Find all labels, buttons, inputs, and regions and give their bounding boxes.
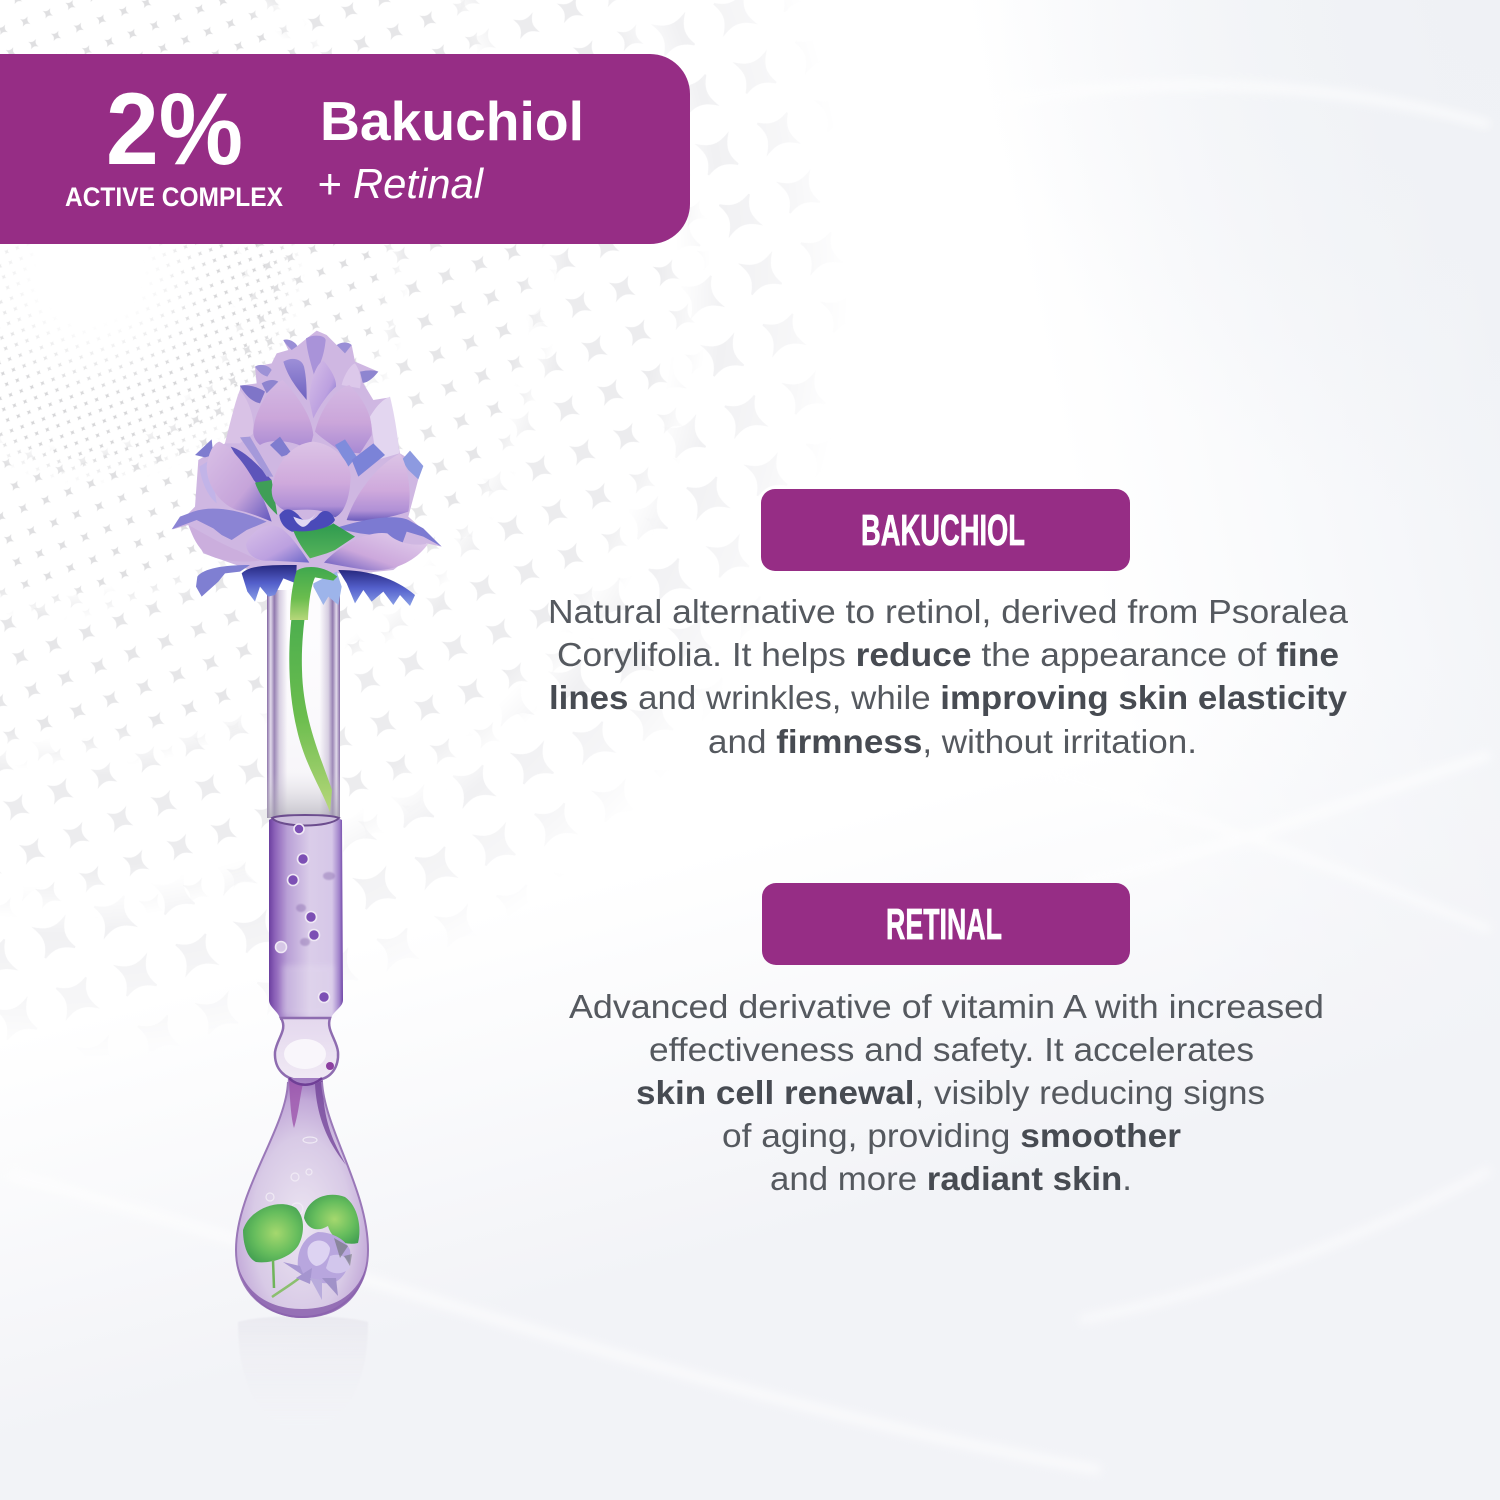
retinal description: of aging, providing smoother [722,1117,1181,1154]
droplet with botanicals [236,1078,368,1318]
bakuchiol description: and firmness , without irritation. [708,723,1197,760]
active complex label: ACTIVE COMPLEX [65,182,283,212]
bakuchiol label: BAKUCHIOL [861,506,1025,555]
upper stem [290,567,337,620]
empty glass tube [267,575,340,818]
center petal [272,442,351,517]
retinal description: effectiveness and safety. It accelerates [649,1031,1254,1068]
retinal description: Advanced derivative of vitamin A with increased [569,988,1324,1025]
bakuchiol description [548,593,1349,760]
bottom fringe [196,565,415,606]
liquid tube [269,815,343,1020]
glass bulb [275,1018,338,1080]
bakuchiol description: Corylifolia. It helps reduce the appearance of fine [557,636,1339,673]
retinal subheading: + Retinal [317,160,485,207]
dropper reflection [238,1316,368,1430]
flower silhouette [173,331,442,573]
retinal description: and more radiant skin . [770,1160,1132,1197]
green calyx [293,523,355,558]
retinal label: RETINAL [886,900,1002,949]
back petals [199,336,399,503]
leaf left [243,1204,303,1262]
left big petal [207,442,272,522]
green stem [289,575,332,812]
side frill petals [172,509,442,550]
header banner [0,54,690,244]
flower dropper illustration [172,331,442,1430]
bubbles [276,824,330,1002]
droplet rim [237,1262,367,1318]
star dot pattern [0,0,793,1004]
leaf right [304,1195,359,1244]
retinal description [569,988,1324,1197]
bakuchiol description: lines and wrinkles, while improving skin elasticity [549,679,1348,716]
retinal description: skin cell renewal , visibly reducing signs [636,1074,1265,1111]
right big petal [347,453,410,521]
bakuchiol label [761,489,1130,571]
center petal frill [279,509,335,532]
bakuchiol heading: Bakuchiol [320,90,584,152]
flower [172,331,442,620]
lower petals [188,525,428,570]
upper petals [195,380,423,483]
small flower [283,1232,352,1300]
percentage: 2% [106,72,243,186]
bakuchiol description: Natural alternative to retinol, derived from Psoralea [548,593,1349,630]
retinal label [762,883,1130,965]
